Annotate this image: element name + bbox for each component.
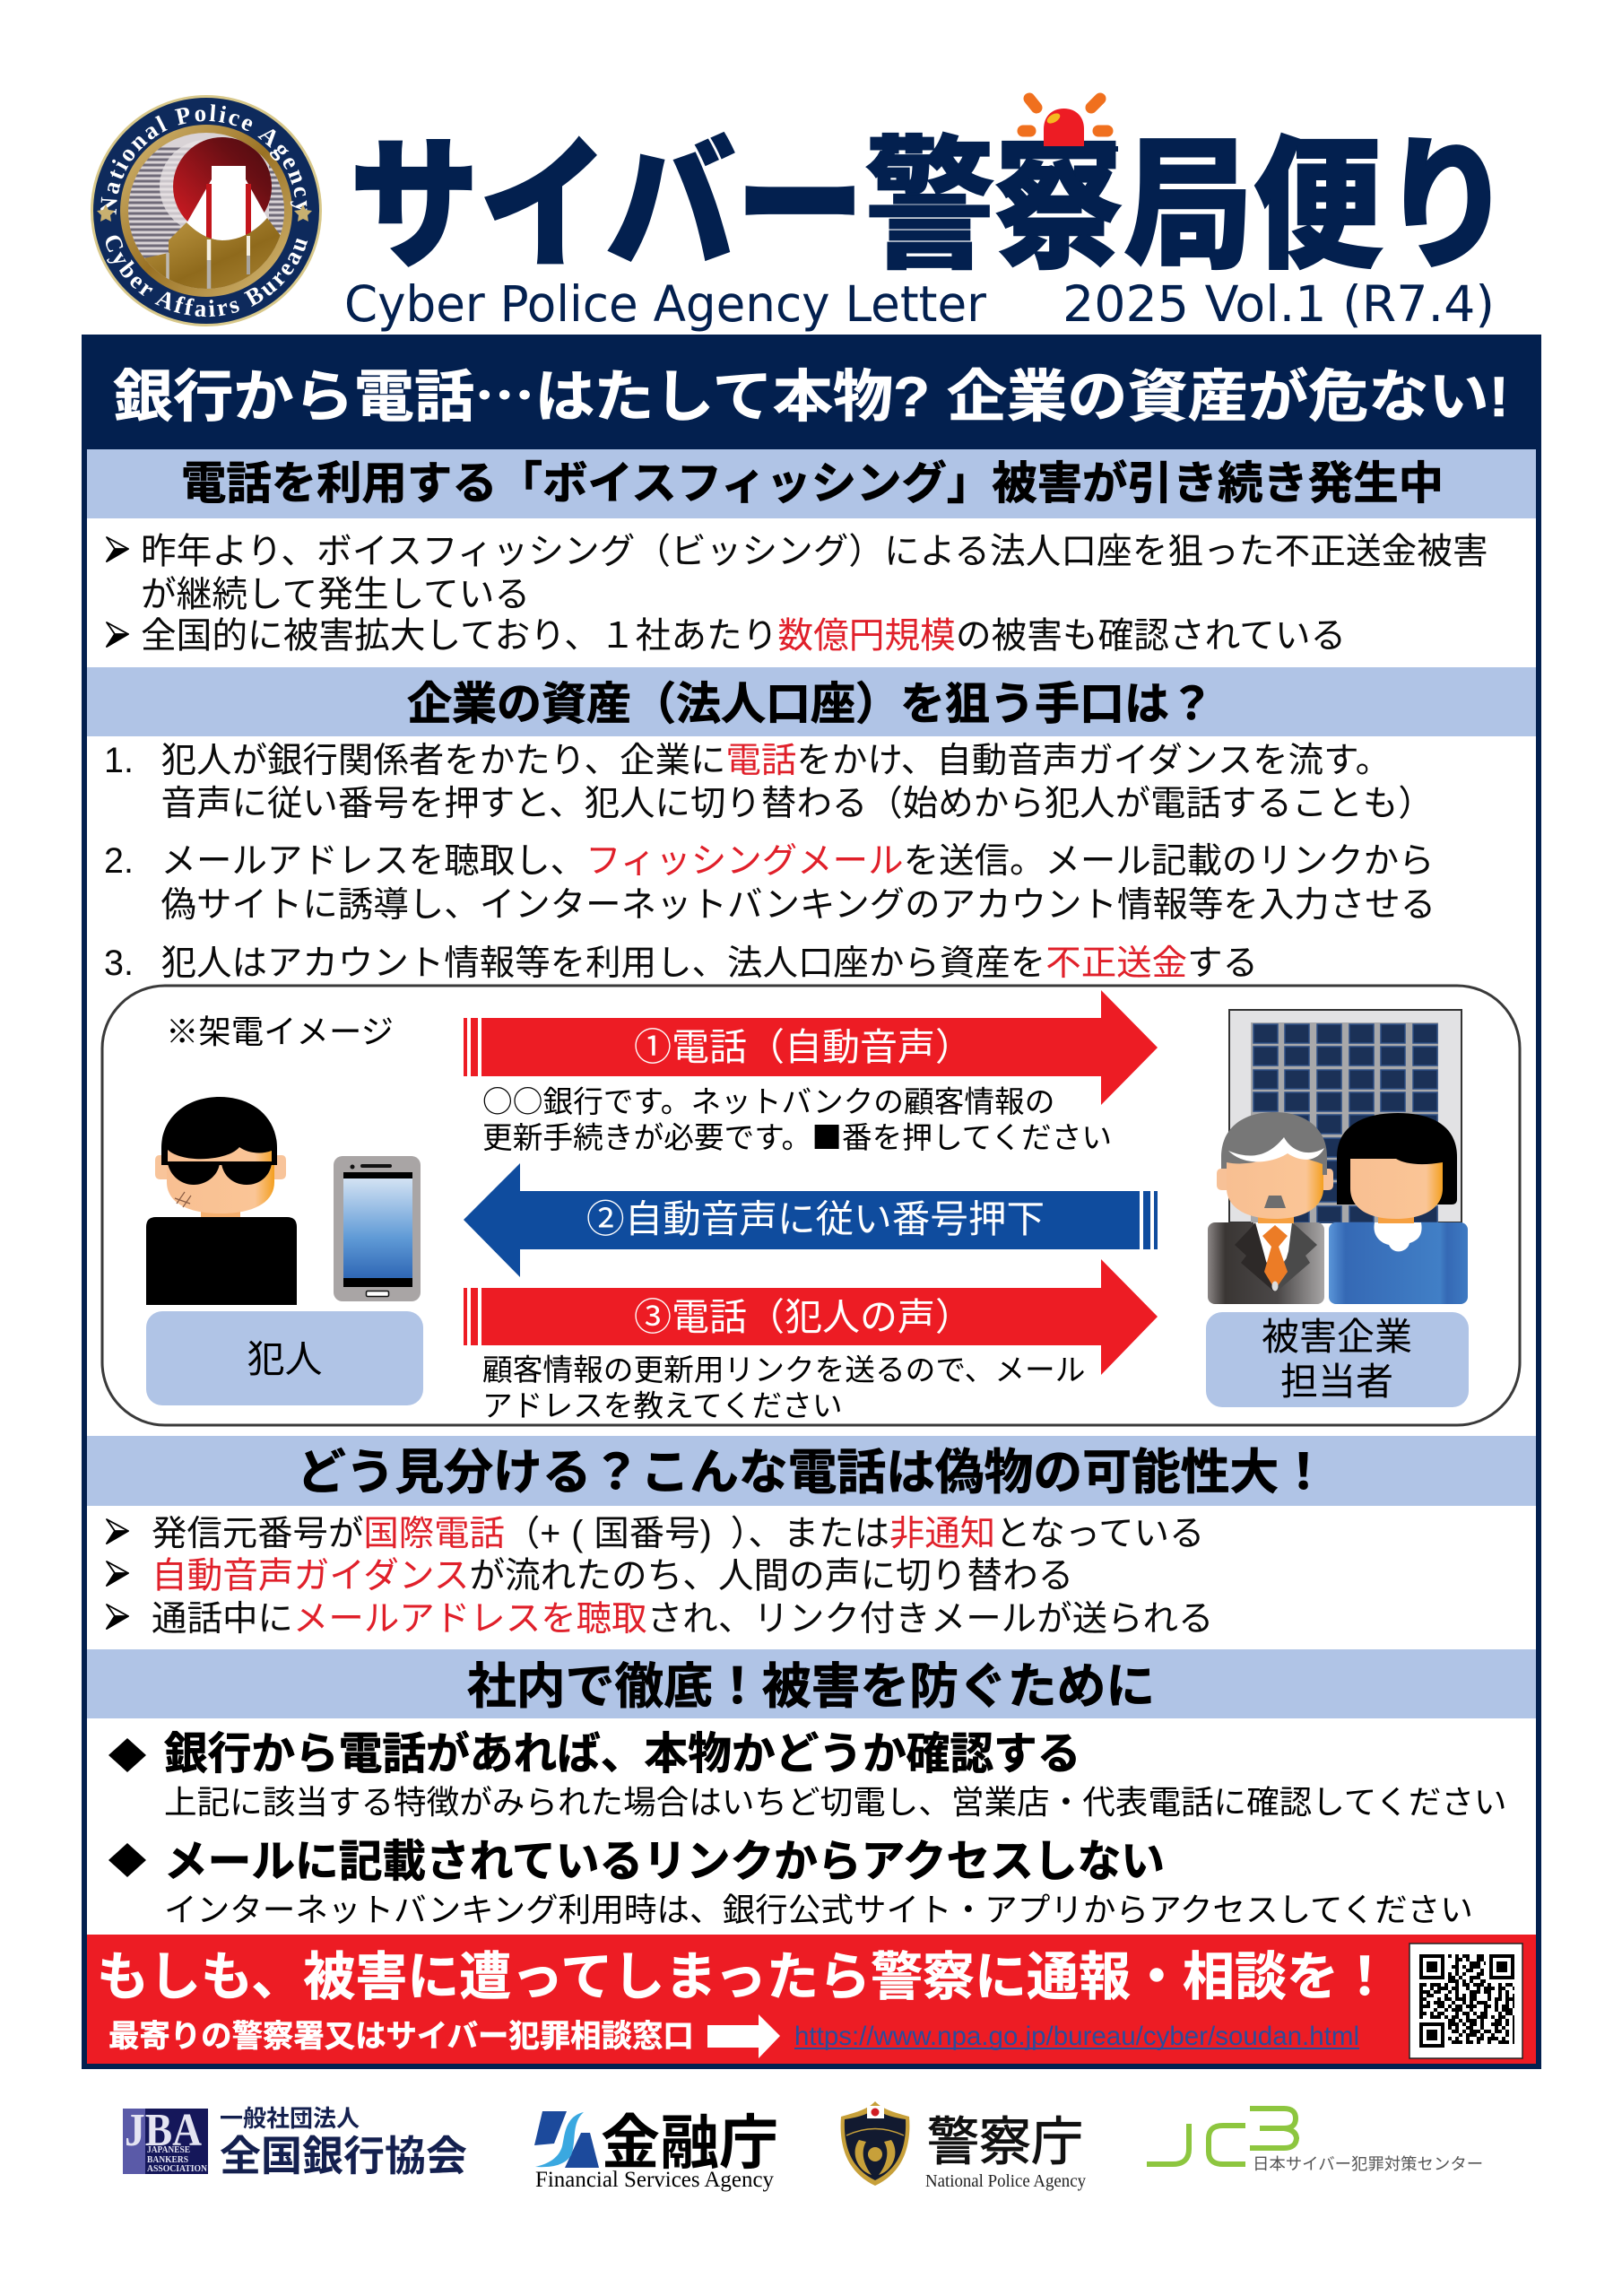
seal stars — [97, 204, 312, 222]
consultation link text: https://www.npa.go.jp/bureau/cyber/soudan.html — [794, 2022, 1359, 2051]
panel: attack method — [87, 667, 1536, 983]
numbered steps — [104, 741, 1436, 983]
logo: Japanese Bankers Association: JBA — [125, 2105, 202, 2156]
numbered steps: 2. — [104, 841, 134, 881]
panel: prevention — [87, 1649, 1536, 1928]
heading: attack method — [87, 667, 1536, 736]
icon: siren light — [1004, 99, 1118, 152]
arrow: to link — [707, 2014, 780, 2058]
heading: prevention — [87, 1649, 1536, 1718]
overview text block: が継続して発生している — [141, 575, 530, 614]
heading: voice phishing: 電話を利用する「ボイスフィッシング」被害が引き続き発生中 — [181, 458, 1444, 509]
numbered steps: 犯人が銀行関係者をかたり、企業に電話をかけ、自動音声ガイダンスを流す。 — [161, 741, 1391, 780]
logo: Financial Services Agency: 金融庁 — [601, 2109, 778, 2176]
arrow 3: criminal voice: ③電話（犯人の声） — [634, 1296, 973, 1338]
logo: National Police Agency — [841, 2101, 1086, 2191]
numbered steps: 犯人はアカウント情報等を利用し、法人口座から資産を不正送金する — [161, 944, 1258, 983]
panel: call image diagram — [102, 986, 1520, 1425]
icon: office building — [1229, 1010, 1462, 1222]
speech text 1: ○○銀行です。ネットバンクの顧客情報の — [482, 1077, 1054, 1121]
headline band — [82, 335, 1541, 449]
speech text 2: アドレスを教えてください — [482, 1389, 843, 1423]
spotting bullets — [107, 1514, 1214, 1639]
numbered steps: 3. — [104, 944, 134, 983]
prevention tip 1: 銀行から電話があれば、本物かどうか確認する — [164, 1730, 1080, 1779]
note: call image: ※架電イメージ — [166, 1013, 394, 1050]
heading: attack method: 企業の資産（法人口座）を狙う手口は？ — [407, 679, 1214, 729]
prevention tip 2: インターネットバンキング利用時は、銀行公式サイト・アプリからアクセスしてください — [164, 1892, 1473, 1928]
prevention tip 1: 上記に該当する特徴がみられた場合はいちど切電し、営業店・代表電話に確認してください — [164, 1784, 1507, 1821]
logo: Japanese Bankers Association: JAPANESE — [147, 2145, 190, 2155]
heading: voice phishing — [87, 449, 1536, 518]
panel: report to police banner — [87, 1935, 1536, 2064]
label: victim company staff: 担当者 — [1280, 1361, 1393, 1403]
label: victim company staff: 被害企業 — [1262, 1316, 1412, 1358]
prevention tip 1 — [108, 1730, 1507, 1821]
label: criminal — [146, 1311, 423, 1405]
arrow 1: phone call: ①電話（自動音声） — [634, 1026, 973, 1068]
numbered steps: メールアドレスを聴取し、フィッシングメールを送信。メール記載のリンクから — [161, 841, 1435, 881]
logo: Japanese Bankers Association: 一般社団法人 — [220, 2105, 360, 2132]
QR code — [1409, 1944, 1522, 2058]
label: criminal: 犯人 — [247, 1338, 323, 1380]
panel: voice phishing overview — [87, 449, 1536, 656]
logo: National Police Agency: 警察庁 — [927, 2113, 1083, 2171]
icon: smartphone — [334, 1156, 421, 1301]
speech text 2 — [482, 1353, 1085, 1423]
speech text 1 — [482, 1077, 1112, 1157]
prevention tip 2: メールに記載されているリンクからアクセスしない — [164, 1838, 1165, 1886]
logo: National Police Agency: National Police Agency — [925, 2171, 1086, 2191]
panel: how to spot fakes — [87, 1436, 1536, 1639]
spotting bullets: 通話中にメールアドレスを聴取され、リンク付きメールが送られる — [152, 1599, 1214, 1639]
logo: Japanese Bankers Association — [123, 2105, 467, 2179]
headline band: 銀行から電話 …はたして本物? 企業の資産が危ない! — [113, 352, 1509, 433]
main frame — [84, 337, 1539, 2066]
subtitle: Cyber Police Agency Letter: Cyber Police Agency Letter — [344, 275, 986, 333]
overview text block: 昨年より、ボイスフィッシング（ビッシング）による法人口座を狙った不正送金被害 — [141, 532, 1488, 571]
icon: male employee — [1208, 1112, 1333, 1304]
issue label: 2025 Vol.1 (R7.4) — [1063, 275, 1495, 333]
icon: criminal — [146, 1097, 297, 1305]
arrow 1: phone call — [464, 990, 1158, 1105]
banner sub text: 最寄りの警察署又はサイバー犯罪相談窓口 — [108, 2020, 694, 2054]
arrow 2: push number — [464, 1163, 1158, 1277]
numbered steps: 1. — [104, 741, 134, 780]
overview text block — [107, 532, 1488, 656]
logo: Financial Services Agency — [534, 2109, 778, 2192]
logo: JC3: 日本サイバー犯罪対策センター — [1253, 2154, 1483, 2173]
logo: Japanese Bankers Association: ASSOCIATION — [147, 2164, 208, 2174]
spotting bullets: 自動音声ガイダンスが流れたのち、人間の声に切り替わる — [152, 1556, 1073, 1596]
prevention tip 2 — [108, 1838, 1473, 1928]
logo: Japanese Bankers Association: BANKERS — [147, 2155, 188, 2165]
arrow 2: push number: ②自動音声に従い番号押下 — [586, 1198, 1045, 1241]
spotting bullets: 発信元番号が国際電話（+(国番号)）、または非通知となっている — [152, 1514, 1204, 1553]
seal text: Cyber Affairs Bureau: Cyber Affairs Bureau — [106, 235, 308, 317]
speech text 2: 顧客情報の更新用リンクを送るので、メール — [482, 1353, 1085, 1387]
overview text block: 全国的に被害拡大しており、１社あたり数億円規模の被害も確認されている — [141, 616, 1346, 656]
label: victim company staff — [1206, 1312, 1469, 1407]
banner headline: もしも、被害に遭ってしまったら警察に通報・相談を！ — [97, 1948, 1391, 2006]
numbered steps: 偽サイトに誘導し、インターネットバンキングのアカウント情報等を入力させる — [161, 885, 1436, 925]
arrow 3: criminal voice — [464, 1259, 1158, 1375]
heading: prevention: 社内で徹底！被害を防ぐために — [467, 1658, 1155, 1714]
logo: JC3 — [1147, 2109, 1483, 2173]
heading: how to spot fakes: どう見分ける？こんな電話は偽物の可能性大！ — [297, 1446, 1328, 1500]
icon: female employee — [1329, 1113, 1468, 1304]
numbered steps: 音声に従い番号を押すと、犯人に切り替わる（始めから犯人が電話することも） — [161, 784, 1434, 823]
title: サイバー警察局便り — [350, 126, 1512, 286]
police agency seal logo — [91, 95, 322, 326]
heading: how to spot fakes — [87, 1436, 1536, 1506]
logo: Japanese Bankers Association: 全国銀行協会 — [220, 2133, 467, 2179]
logo: Financial Services Agency: Financial Services Agency — [535, 2168, 774, 2192]
seal text: National Police Agency: National Police Agency — [100, 104, 307, 215]
speech text 1: 更新手続きが必要です。■番を押してください — [482, 1113, 1112, 1157]
